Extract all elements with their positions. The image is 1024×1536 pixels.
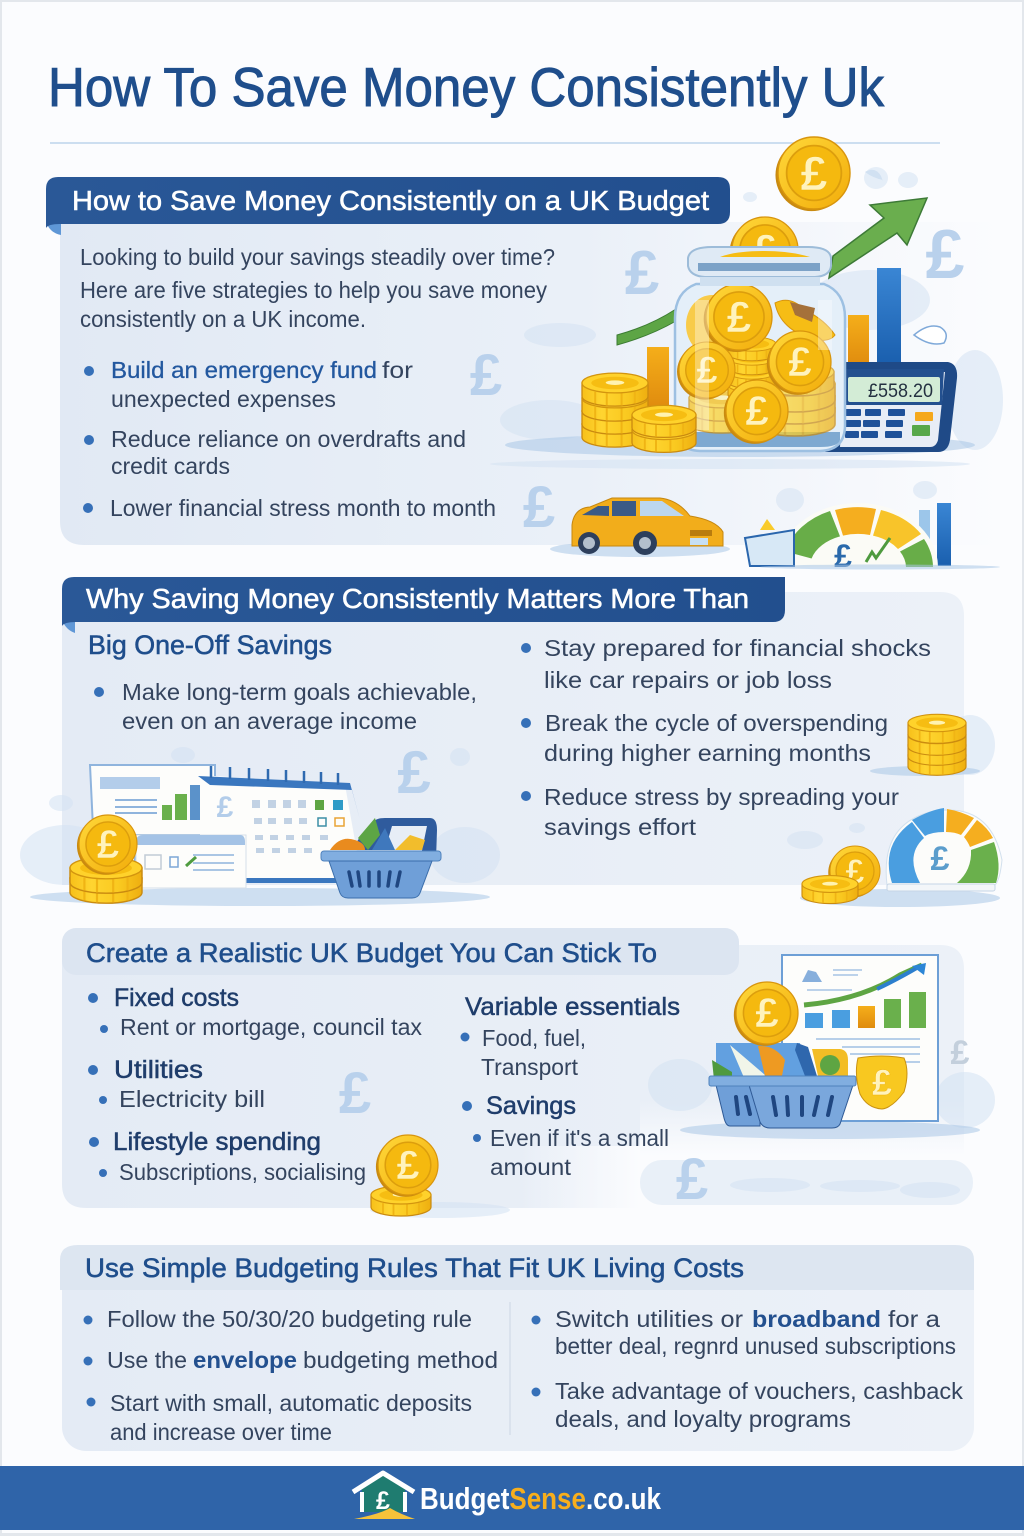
basket with groceries xyxy=(709,982,856,1128)
logo: house icon xyxy=(353,1473,415,1519)
background blobs xyxy=(20,747,500,906)
illustration: pound strip: £ xyxy=(676,1147,708,1212)
panel background xyxy=(62,945,964,1208)
left bullet xyxy=(94,679,477,734)
shield coin: £ xyxy=(872,1062,892,1103)
card xyxy=(136,835,246,888)
footer xyxy=(0,1466,1024,1536)
right list xyxy=(460,993,680,1180)
left bullets: budgeting method xyxy=(303,1347,498,1373)
bullet list: Build an emergency fund xyxy=(111,357,377,383)
right bullets xyxy=(521,635,931,840)
title: How To Save Money Consistently Uk xyxy=(48,56,884,118)
pound symbols: £ xyxy=(625,239,659,308)
section header: How to Save Money Consistently on a UK Budget xyxy=(72,185,709,216)
left list: Rent or mortgage, council tax xyxy=(120,1014,422,1040)
background blobs xyxy=(490,167,1003,469)
left bullet: even on an average income xyxy=(122,708,417,734)
section header xyxy=(46,177,730,228)
illustration: budget report and basket xyxy=(648,955,995,1139)
right list: Variable essentials xyxy=(465,993,680,1021)
section header: Use Simple Budgeting Rules That Fit UK Living Costs xyxy=(85,1253,744,1283)
right bullets: Break the cycle of overspending xyxy=(545,710,888,736)
right bullets: Switch utilities or xyxy=(555,1306,743,1332)
illustration: pound strip xyxy=(640,1147,973,1212)
left list: Lifestyle spending xyxy=(113,1128,321,1156)
gauge xyxy=(745,481,1000,574)
intro text: consistently on a UK income. xyxy=(80,306,366,332)
right bullets: during higher earning months xyxy=(544,740,871,766)
logo: wordmark: BudgetSense.co.uk xyxy=(420,1481,662,1516)
pound symbols xyxy=(470,215,965,540)
jar and coins: £ xyxy=(788,338,812,385)
bars xyxy=(647,268,901,407)
right list: Food, fuel, xyxy=(482,1025,586,1051)
left bullets xyxy=(84,1306,498,1445)
left bullets: envelope xyxy=(193,1347,297,1373)
pound symbols: £ xyxy=(470,343,502,408)
right bullets: like car repairs or job loss xyxy=(544,667,832,693)
pound symbols: £ xyxy=(523,475,555,540)
report sheet xyxy=(782,955,938,1121)
right bullets: savings effort xyxy=(544,814,697,840)
jar and coins: £ xyxy=(727,293,752,342)
gauge dial: £ xyxy=(931,840,950,878)
illustration: stacked coins xyxy=(870,714,995,776)
section header xyxy=(60,1245,974,1290)
car xyxy=(550,498,730,557)
bullet list xyxy=(83,357,496,521)
coin stack: £ xyxy=(97,823,119,867)
illustration: car and gauge xyxy=(550,481,1000,574)
bullet list: Reduce reliance on overdrafts and xyxy=(111,426,466,452)
jar and coins xyxy=(675,217,845,451)
calendar xyxy=(198,766,362,883)
panel: why saving consistently matters xyxy=(62,577,964,885)
right bullets: deals, and loyalty programs xyxy=(555,1406,851,1432)
subheading: Big One-Off Savings xyxy=(88,630,332,660)
illustration: pound and coin bottom left: £ xyxy=(397,1142,420,1188)
right bullets xyxy=(532,1306,963,1432)
logo: house icon: £ xyxy=(376,1487,390,1515)
left bullets: and increase over time xyxy=(110,1419,332,1445)
panel: how to save money xyxy=(46,177,1000,545)
right list: Even if it's a small xyxy=(490,1125,669,1151)
panel background xyxy=(62,1260,974,1451)
intro text: Looking to build your savings steadily over time? xyxy=(80,244,555,270)
falling coin xyxy=(775,137,850,211)
calculator: £558.20 xyxy=(868,381,933,402)
right list: Transport xyxy=(481,1054,578,1080)
panel: simple budgeting rules xyxy=(60,1245,974,1451)
right bullets: broadband xyxy=(752,1306,881,1332)
jar and coins: £ xyxy=(745,387,769,434)
right bullets: Take advantage of vouchers, cashback xyxy=(555,1378,963,1404)
illustration: savings jar scene xyxy=(470,137,1003,540)
right bullets: for a xyxy=(888,1306,941,1332)
left bullets: Follow the 50/30/20 budgeting rule xyxy=(107,1306,472,1332)
pound symbols: £ xyxy=(926,215,965,293)
intro text xyxy=(80,244,555,332)
green growth arrow xyxy=(617,198,927,345)
left list: Electricity bill xyxy=(119,1086,265,1112)
bullet list: for xyxy=(382,357,413,383)
bullet list: Lower financial stress month to month xyxy=(110,495,496,521)
jar and coins: £ xyxy=(696,350,718,392)
shield coin xyxy=(856,1056,907,1109)
panel background xyxy=(62,592,964,885)
left bullets: Use the xyxy=(107,1347,187,1373)
calculator xyxy=(825,362,957,452)
background blobs: £ xyxy=(951,1034,970,1072)
left list: Utilities xyxy=(114,1056,203,1084)
left list xyxy=(88,984,422,1185)
panel background xyxy=(60,222,1000,545)
illustration: gauge and coins: £ xyxy=(846,853,865,891)
right bullets: Reduce stress by spreading your xyxy=(544,784,899,810)
background blobs xyxy=(648,1034,995,1139)
bullet list: credit cards xyxy=(111,453,230,479)
illustration: gauge and coins xyxy=(787,808,1002,907)
report document xyxy=(90,765,245,870)
right list: Savings xyxy=(486,1092,576,1120)
illustration: pound and coin bottom left: £ xyxy=(339,1061,371,1126)
illustration: pound and coin bottom left xyxy=(339,1061,510,1218)
coin stacks xyxy=(582,373,696,452)
gauge dial xyxy=(886,808,1002,891)
gauge: £ xyxy=(834,538,852,574)
basket with groceries: £ xyxy=(755,989,779,1036)
right list: amount xyxy=(490,1154,571,1180)
coin stack xyxy=(70,815,142,903)
right bullets: better deal, regnrd unused subscriptions xyxy=(555,1333,956,1359)
shopping basket xyxy=(321,818,441,898)
section header xyxy=(62,577,785,626)
illustration: budget documents and basket xyxy=(20,739,500,906)
left bullet: Make long-term goals achievable, xyxy=(122,679,477,705)
left list: Fixed costs xyxy=(114,984,239,1012)
jar and coins: £ xyxy=(753,226,778,275)
section header: Why Saving Money Consistently Matters More Than xyxy=(86,583,749,614)
bullet list: unexpected expenses xyxy=(111,386,336,412)
pound symbol: £ xyxy=(397,739,431,806)
section header xyxy=(62,928,739,975)
left list: Subscriptions, socialising xyxy=(119,1159,366,1185)
panel: realistic budget xyxy=(62,928,980,1212)
right bullets: Stay prepared for financial shocks xyxy=(544,635,931,661)
section header: Create a Realistic UK Budget You Can Stick To xyxy=(86,938,657,968)
left bullets: Start with small, automatic deposits xyxy=(110,1390,472,1416)
calendar: £ xyxy=(217,791,234,824)
falling coin: £ xyxy=(801,148,828,201)
intro text: Here are five strategies to help you save money xyxy=(80,277,547,303)
